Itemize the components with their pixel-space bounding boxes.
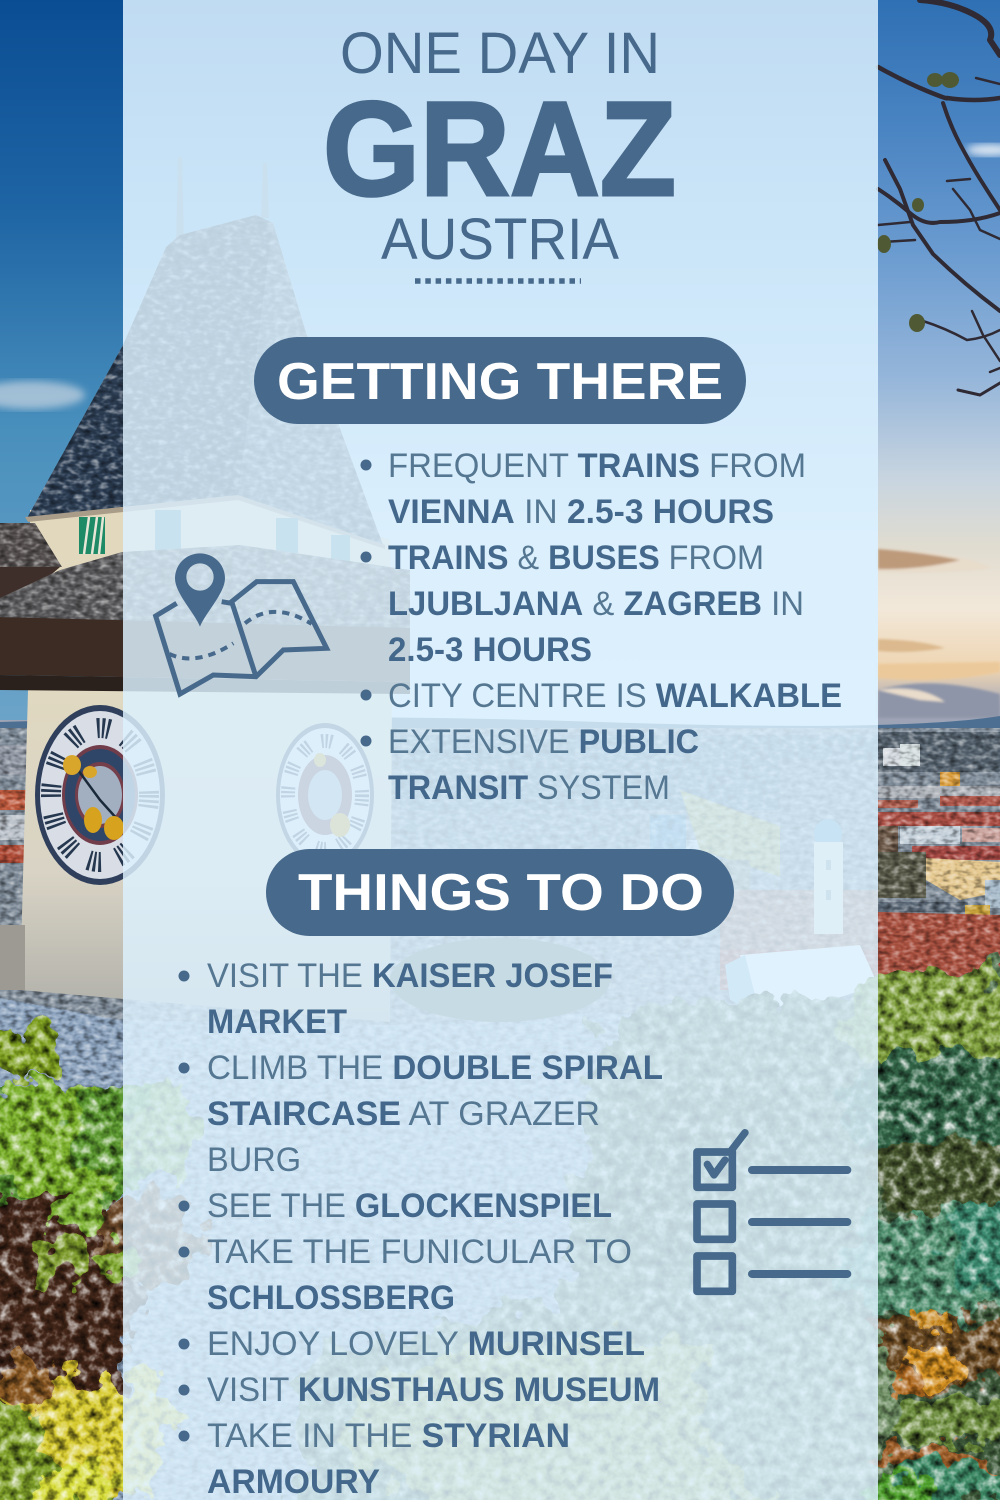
sky (0, 0, 1000, 760)
list: getting there: CITY CENTRE IS WALKABLE (388, 677, 842, 715)
dotted divider (415, 278, 581, 284)
sunset clouds (878, 549, 1000, 718)
list: things to do: CLIMB THE DOUBLE SPIRAL (207, 1049, 663, 1087)
icon: checklist (697, 1133, 847, 1291)
list: getting there: VIENNA IN 2.5-3 HOURS (388, 493, 774, 531)
tower windows (79, 510, 350, 570)
foliage, bottom right (300, 960, 1000, 1500)
foliage, bottom left (0, 1025, 200, 1500)
heading: getting there: GETTING THERE (277, 353, 723, 411)
church tower in the distance (814, 819, 843, 934)
list: things to do: VISIT KUNSTHAUS MUSEUM (207, 1371, 660, 1409)
list: getting there: EXTENSIVE PUBLIC (388, 723, 699, 761)
city below the hill (0, 728, 1000, 1028)
list: things to do: SCHLOSSBERG (207, 1279, 455, 1317)
distant hills (0, 716, 1000, 740)
heading: things to do: THINGS TO DO (298, 864, 704, 922)
title: GRAZ (323, 75, 676, 224)
list: things to do: STAIRCASE AT GRAZER (207, 1095, 600, 1133)
list: getting there: FREQUENT TRAINS FROM (388, 447, 806, 485)
list: things to do: TAKE THE FUNICULAR TO (207, 1233, 632, 1271)
list: things to do: ARMOURY (207, 1463, 380, 1500)
heading: things to do (266, 849, 734, 936)
list: things to do: VISIT THE KAISER JOSEF (207, 957, 613, 995)
list: things to do: ENJOY LOVELY MURINSEL (207, 1325, 645, 1363)
list: getting there (360, 447, 842, 807)
title: ONE DAY IN (340, 21, 660, 86)
clock tower (0, 157, 410, 1022)
list: getting there: LJUBLJANA & ZAGREB IN (388, 585, 804, 623)
stone terrace (0, 925, 878, 1500)
list: getting there: 2.5-3 HOURS (388, 631, 592, 669)
translucent panel (123, 0, 878, 1500)
list: things to do: TAKE IN THE STYRIAN (207, 1417, 570, 1455)
icon: map with pin (156, 553, 327, 694)
clock face, side (276, 723, 374, 867)
white awnings on the terrace (725, 945, 878, 1015)
list: things to do (178, 957, 663, 1500)
list: things to do: BURG (207, 1141, 301, 1179)
list: things to do: SEE THE GLOCKENSPIEL (207, 1187, 612, 1225)
heading: getting there (254, 337, 746, 424)
lower roofs and timber gallery (0, 523, 410, 694)
tree buds (877, 72, 959, 332)
list: getting there: TRAINS & BUSES FROM (388, 539, 764, 577)
clock face, front (35, 705, 165, 885)
title (323, 21, 676, 272)
list: getting there: TRANSIT SYSTEM (388, 769, 670, 807)
bare tree branches, top right (878, 0, 1000, 395)
list: things to do: MARKET (207, 1003, 347, 1041)
title: AUSTRIA (381, 207, 619, 272)
